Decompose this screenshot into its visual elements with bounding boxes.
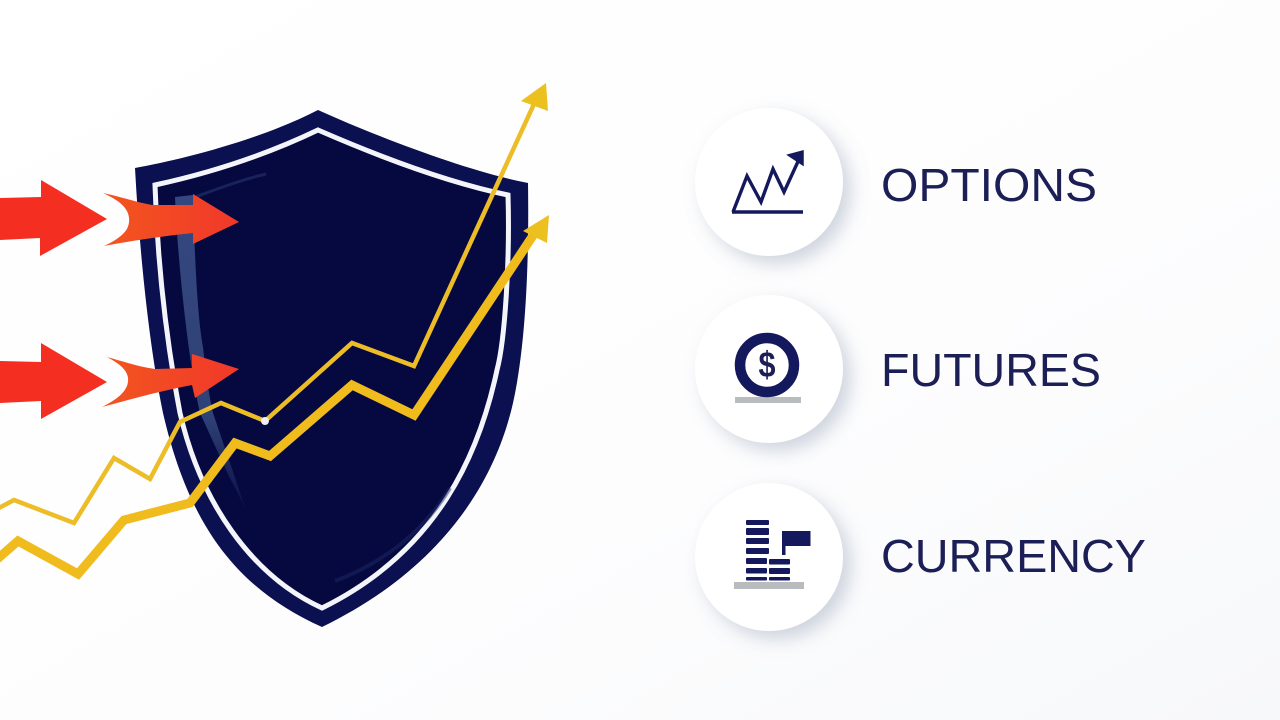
red arrows upper — [0, 180, 239, 256]
item: futures — [695, 295, 1101, 443]
red arrows lower — [0, 343, 239, 419]
shield — [135, 110, 528, 627]
circle badge — [695, 108, 843, 256]
icon: coin stacks with flag — [734, 520, 810, 589]
item: currency — [695, 483, 1146, 631]
circle badge — [695, 295, 843, 443]
label: CURRENCY — [881, 530, 1146, 582]
item: options — [695, 108, 1097, 256]
shield highlight — [175, 174, 450, 581]
thick rising line with arrow — [0, 215, 549, 574]
circle badge — [695, 483, 843, 631]
label: OPTIONS — [881, 159, 1097, 211]
icon: dollar coin: $ — [758, 344, 776, 385]
thin rising line with arrow — [0, 83, 548, 523]
label: FUTURES — [881, 344, 1101, 396]
icon: dollar coin — [735, 338, 801, 403]
icon: rising chart — [732, 151, 803, 212]
